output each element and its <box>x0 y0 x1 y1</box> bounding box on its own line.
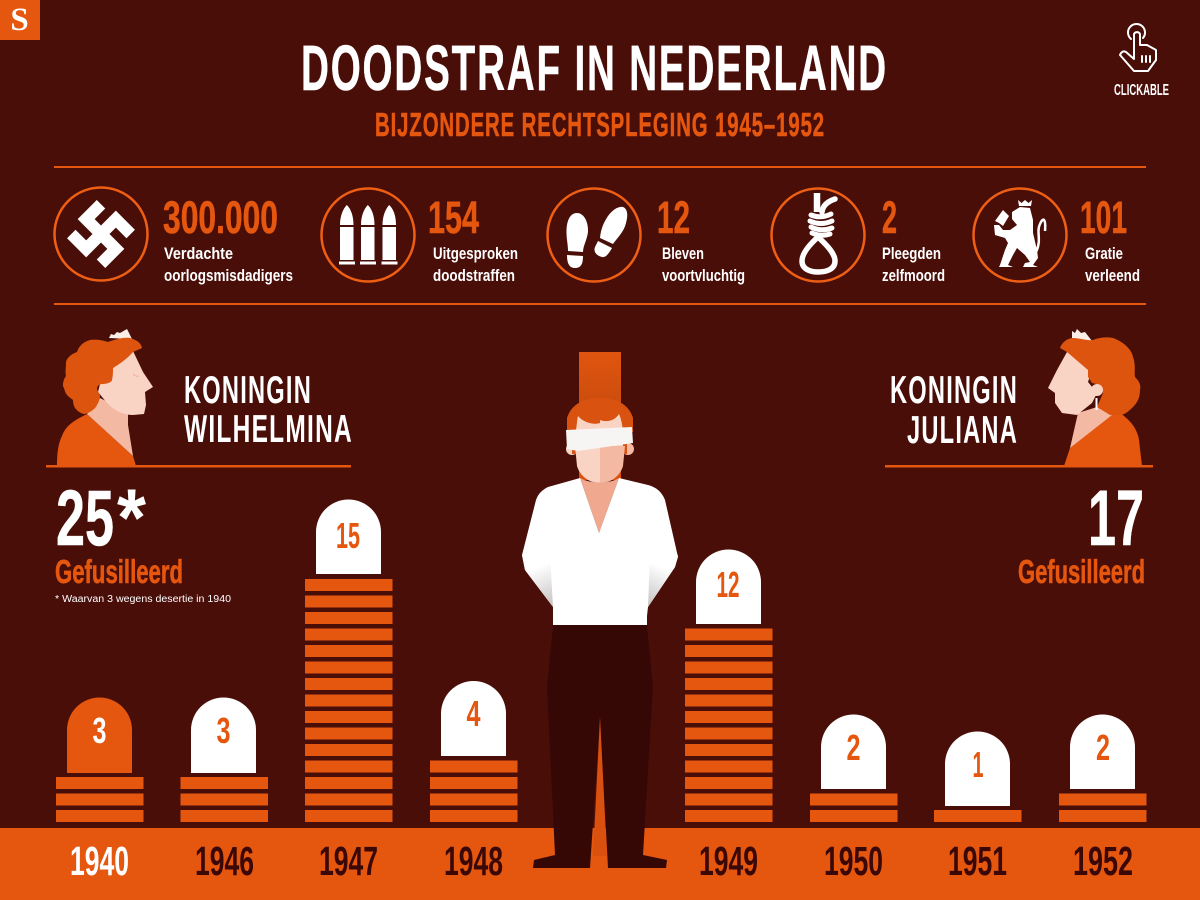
stat: 101 gratie: 101 <box>1080 192 1127 243</box>
stat: 2 zelfmoord: 2 <box>882 192 897 243</box>
bar: 1949: 12 <box>716 564 740 605</box>
bar: 1951 <box>934 732 1022 884</box>
execution post <box>579 352 621 412</box>
bar: 1946 <box>180 698 268 884</box>
shirt <box>522 478 678 625</box>
hair and head <box>566 398 634 483</box>
bar: 1949: 1949 <box>699 838 758 884</box>
stat: 12 voortvluchtig: voortvluchtig <box>662 266 745 285</box>
count: 25 gefusilleerd: * <box>117 473 146 564</box>
heading: Koningin Juliana: JULIANA <box>907 409 1018 452</box>
bar: 1946: 1946 <box>195 838 254 884</box>
count: 25 gefusilleerd: Gefusilleerd <box>55 553 183 590</box>
stat: 154 doodstraffen: Uitgesproken <box>433 244 518 263</box>
heading: Koningin Wilhelmina: KONINGIN <box>184 369 312 412</box>
bar: 1947: 15 <box>336 515 360 556</box>
logo: S <box>10 2 29 38</box>
bar: 1951: 1 <box>972 744 984 785</box>
icon: swastika <box>54 188 148 280</box>
icon: lion <box>974 188 1066 282</box>
ground band <box>0 828 1200 900</box>
neck <box>580 478 619 533</box>
bar: 1950 <box>810 714 898 884</box>
bar: 1940: 1940 <box>70 838 129 884</box>
heading: Koningin Juliana: KONINGIN <box>890 369 1018 412</box>
bar: 1948: 1948 <box>444 838 503 884</box>
heading: Koningin Wilhelmina: WILHELMINA <box>184 408 353 451</box>
stat: 12 voortvluchtig: 12 <box>657 192 690 243</box>
bar: 1949 <box>685 550 772 884</box>
heading: Koningin Wilhelmina <box>184 369 353 451</box>
stat: 12 voortvluchtig: Bleven <box>662 244 704 263</box>
count: 17 gefusilleerd: 17 <box>1088 473 1144 562</box>
bar: 1948 <box>430 681 518 884</box>
stat: 154 doodstraffen: 154 <box>428 192 479 243</box>
bar: 1951: 1951 <box>948 838 1007 884</box>
stat: 300.000 verdachte <box>54 188 293 285</box>
count: 17 gefusilleerd <box>1018 473 1145 590</box>
icon: footprints <box>548 188 640 282</box>
icon: clickable hand <box>1114 24 1169 99</box>
bar: 1947 <box>305 499 392 884</box>
bar: 1940: 3 <box>92 710 106 751</box>
stat: 2 zelfmoord: zelfmoord <box>882 266 945 285</box>
icon: noose <box>772 188 864 282</box>
bar: 1952: 2 <box>1096 727 1110 768</box>
count: 25 gefusilleerd: * Waarvan 3 wegens desertie in 1940 <box>55 594 231 605</box>
stat: 2 zelfmoord <box>772 188 945 285</box>
count: 25 gefusilleerd: 25 <box>56 473 114 562</box>
blindfold <box>566 427 633 451</box>
bar: 1946: 3 <box>216 710 230 751</box>
portrait: Juliana <box>1048 329 1142 466</box>
count: 25 gefusilleerd <box>55 473 231 605</box>
logo <box>0 0 40 40</box>
subtitle: BIJZONDERE RECHTSPLEGING 1945–1952 <box>375 106 825 143</box>
stat: 300.000 verdachte: Verdachte <box>164 244 233 263</box>
stat: 101 gratie: verleend <box>1085 266 1140 285</box>
stat: 101 gratie: Gratie <box>1085 244 1123 263</box>
stat: 154 doodstraffen <box>322 188 518 285</box>
bar: 1948: 4 <box>466 693 480 734</box>
portrait: Wilhelmina <box>57 329 153 466</box>
stat: 154 doodstraffen: doodstraffen <box>433 266 515 285</box>
bar: 1950: 2 <box>846 727 860 768</box>
bar: 1952: 1952 <box>1073 838 1133 884</box>
bar: 1940 <box>56 698 144 884</box>
icon: bullets <box>322 188 414 282</box>
stat: 12 voortvluchtig <box>548 188 745 285</box>
bar: 1952 <box>1059 714 1146 884</box>
stat: 300.000 verdachte: 300.000 <box>163 192 278 243</box>
bar: 1950: 1950 <box>824 838 883 884</box>
trousers <box>533 625 667 868</box>
heading: Koningin Juliana <box>890 369 1018 452</box>
figure: blindfolded man <box>522 352 678 868</box>
bar: 1947: 1947 <box>319 838 378 884</box>
stat: 101 gratie <box>974 188 1140 285</box>
stat: 300.000 verdachte: oorlogsmisdadigers <box>164 266 293 285</box>
stat: 2 zelfmoord: Pleegden <box>882 244 941 263</box>
